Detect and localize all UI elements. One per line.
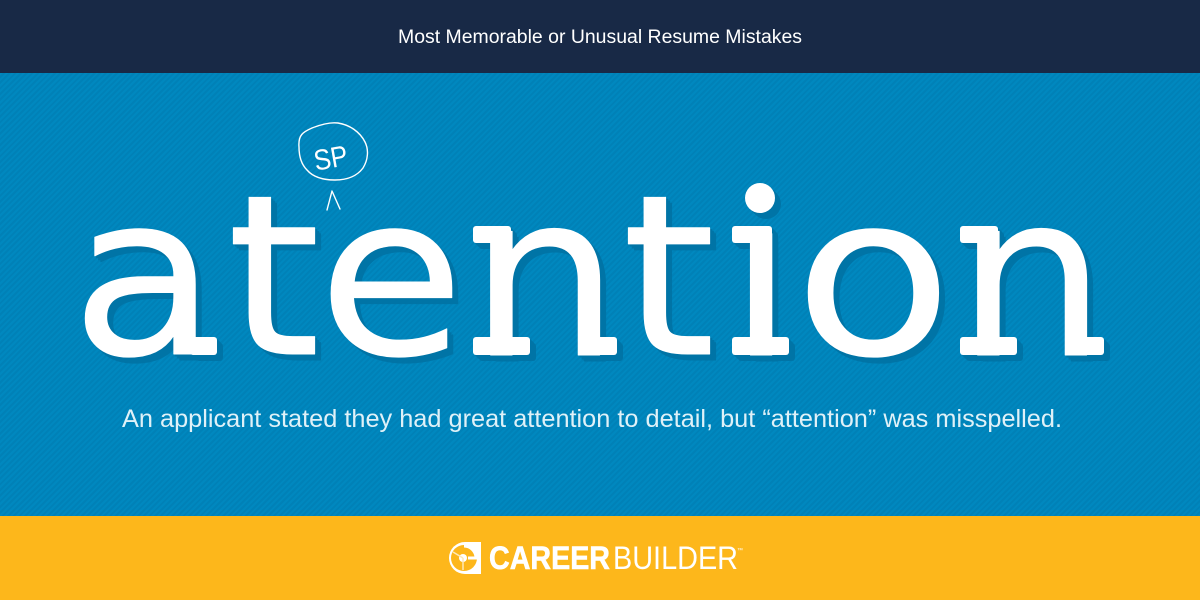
logo wordmark: CAREER [489,540,610,576]
misspelled word: atention: t [622,140,715,409]
logo: CareerBuilder: BUILDER [613,540,738,576]
icon: insertion caret [327,191,340,210]
misspelled word: atention: n [469,146,620,409]
misspelled word: atention: a [71,148,217,407]
icon: hand-drawn circle [299,123,367,180]
hand-drawn proofreading mark [299,123,367,210]
misspelled word: atention: e [318,148,464,407]
misspelled word: atention [84,183,1110,364]
title: Most Memorable or Unusual Resume Mistakes [398,27,802,48]
handwritten SP note: SP [311,140,350,178]
icon: logo mark [449,542,481,574]
header bar [0,0,1200,73]
logo: CareerBuilder [449,540,743,576]
misspelled word: atention: i [728,146,794,409]
main blue panel [0,73,1200,516]
misspelled word: atention: o [794,147,953,408]
footer bar [0,516,1200,600]
misspelled word: atention: t [227,140,320,409]
logo: CareerBuilder: ™ [737,547,743,554]
misspelled word: atention: n [956,146,1107,409]
subtitle: An applicant stated they had great attention to detail, but “attention” was misspelled. [122,405,1062,433]
